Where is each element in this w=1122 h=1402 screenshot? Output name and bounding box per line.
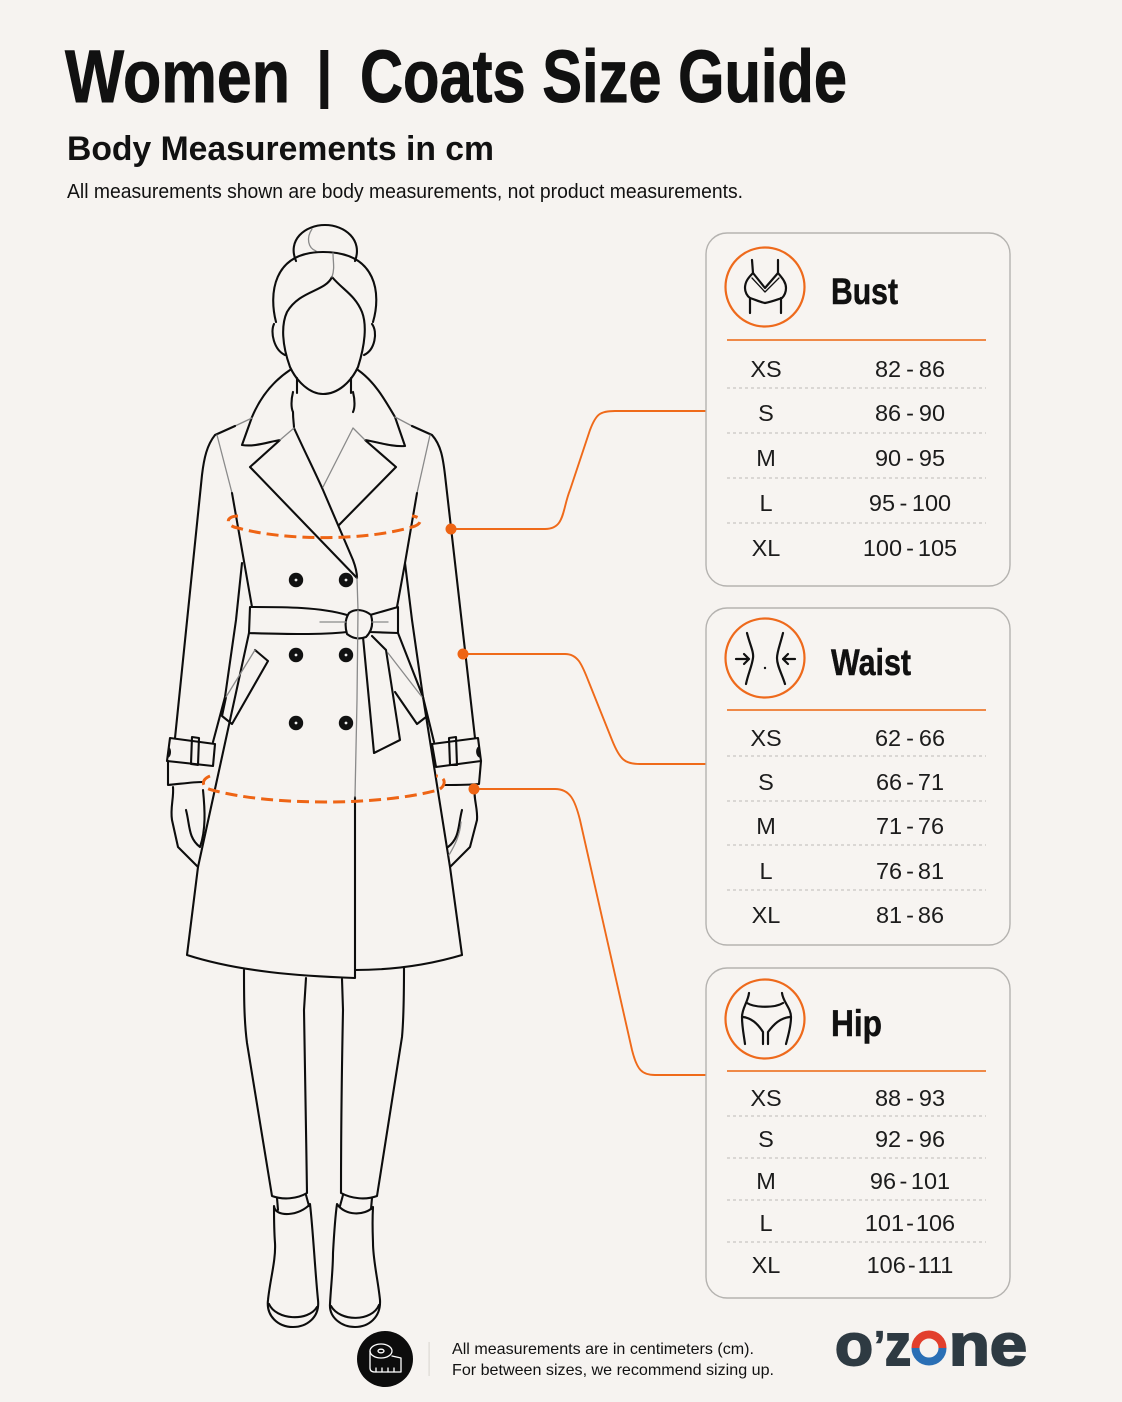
size table: bust: L [759, 490, 773, 516]
size table: bust: XL [752, 535, 780, 561]
size table: hip: 96-101 [870, 1168, 950, 1194]
title: | [316, 40, 333, 110]
size table: hip: 92-96 [875, 1126, 945, 1152]
size table: bust: 95-100 [869, 490, 951, 516]
icon: waist [726, 618, 804, 698]
size table: waist: XS [750, 725, 782, 751]
size table: waist: 71-76 [876, 813, 944, 839]
size table: hip: 88-93 [875, 1085, 945, 1111]
icon: bra [726, 248, 804, 326]
heading: bust: Bust [831, 271, 898, 312]
size table: waist: 81-86 [876, 902, 944, 928]
connector: bust [446, 411, 706, 534]
size table: hip: L [759, 1210, 773, 1236]
size table: waist: XL [752, 902, 780, 928]
size table: bust: S [758, 400, 774, 426]
title [65, 35, 847, 118]
size table: waist: L [759, 858, 773, 884]
size table: waist: 76-81 [876, 858, 944, 884]
size table: bust [727, 356, 986, 561]
bust measurement line [228, 516, 420, 538]
intro note: All measurements shown are body measurements, not product measurements. [67, 181, 743, 203]
figure: woman in trench coat [167, 225, 481, 1327]
heading: hip: Hip [831, 1003, 882, 1044]
cuffs [167, 737, 481, 785]
head and hair [272, 225, 376, 394]
size table: bust: M [756, 445, 776, 471]
size table: bust: 86-90 [875, 400, 945, 426]
buttons [289, 573, 353, 730]
legs [244, 967, 404, 1198]
size table: hip: S [758, 1126, 774, 1152]
coat sleeves and shoulders [175, 417, 475, 742]
size table: hip: XS [750, 1085, 782, 1111]
icon: measuring tape [357, 1331, 413, 1387]
panel: hip [706, 968, 1010, 1298]
logo: ozone: ne [949, 1313, 1027, 1378]
connector: waist [458, 648, 706, 764]
connector: hip [468, 784, 706, 1075]
subtitle: Body Measurements in cm [67, 130, 494, 168]
size table: waist: 66-71 [876, 769, 944, 795]
coat skirt and front edge [187, 610, 462, 978]
size table: waist: M [756, 813, 776, 839]
logo: ozone: o [835, 1313, 873, 1378]
size table: waist [727, 725, 986, 928]
size table: bust: 90-95 [875, 445, 945, 471]
panel: waist [706, 608, 1010, 945]
heading: waist: Waist [831, 642, 911, 683]
size table: hip: XL [752, 1252, 780, 1278]
hip measurement line [203, 776, 444, 802]
size table: bust: 82-86 [875, 356, 945, 382]
size table: bust: XS [750, 356, 782, 382]
size table: hip: M [756, 1168, 776, 1194]
size table: waist: S [758, 769, 774, 795]
size table: bust: 100-105 [863, 535, 957, 561]
belt and knot [249, 607, 400, 753]
icon: hips [726, 980, 804, 1058]
size table: waist: 62-66 [875, 725, 945, 751]
boots [268, 1195, 380, 1327]
footer note [452, 1341, 774, 1379]
footer note: For between sizes, we recommend sizing up. [452, 1362, 774, 1379]
panel: bust [706, 233, 1010, 586]
pockets [222, 650, 426, 724]
size table: hip: 101-106 [865, 1210, 955, 1236]
collar and lapels [242, 370, 405, 610]
hands [171, 787, 477, 867]
size table: hip [727, 1085, 986, 1278]
logo: ozone: z [885, 1313, 911, 1378]
footer note: All measurements are in centimeters (cm). [452, 1341, 754, 1358]
title: Coats Size Guide [360, 35, 847, 118]
logo: ozone [835, 1313, 1027, 1378]
title: Women [65, 35, 290, 118]
logo: ozone: ’ [874, 1324, 885, 1368]
size table: hip: 106-111 [867, 1252, 953, 1278]
